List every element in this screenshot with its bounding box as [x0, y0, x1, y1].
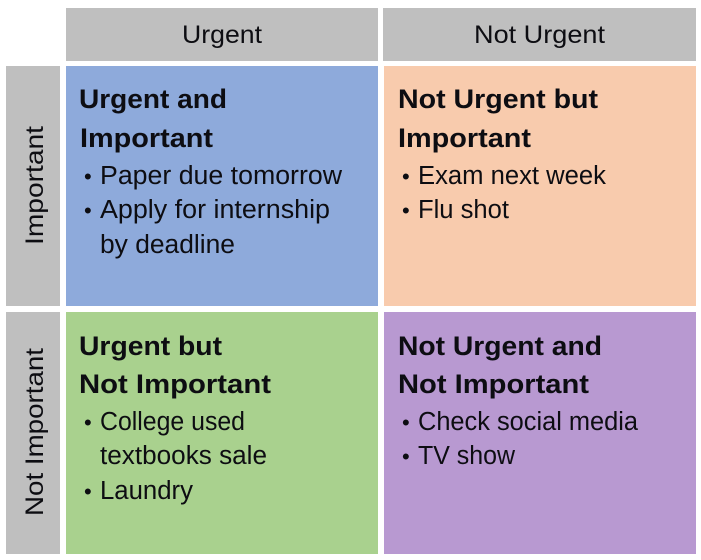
heading: Not Important [398, 369, 589, 399]
task list: • [402, 410, 410, 435]
task list: TV show [418, 442, 516, 470]
row header: Not Important: Not Important [21, 348, 49, 516]
heading [79, 84, 227, 153]
task list: • [402, 198, 410, 223]
task list: Paper due tomorrow [100, 162, 343, 190]
task list: • [402, 444, 410, 469]
panel: urgent and important [66, 66, 378, 306]
column header: Urgent [66, 8, 378, 61]
task list: Laundry [100, 477, 193, 505]
column header: Not Urgent [383, 8, 696, 61]
task list [84, 408, 267, 505]
heading: Important [80, 123, 213, 153]
heading: Urgent but [79, 331, 222, 361]
row header: Not Important [6, 312, 60, 554]
heading: Not Important [79, 369, 271, 399]
task list: Apply for internship [100, 196, 330, 224]
heading: Not Urgent but [398, 84, 598, 114]
panel: not urgent and not important [384, 312, 696, 554]
panel: not urgent but important [384, 66, 696, 306]
heading [79, 331, 271, 399]
task list [84, 162, 343, 259]
task list [402, 408, 639, 470]
heading [398, 331, 602, 399]
task list: • [84, 479, 92, 504]
column header: Not Urgent: Not Urgent [474, 21, 605, 49]
task list: College used [100, 408, 245, 436]
task list: • [84, 198, 92, 223]
panel: urgent but not important [66, 312, 378, 554]
row header: Important: Important [21, 126, 49, 245]
task list: • [84, 164, 92, 189]
row header: Important [6, 66, 60, 306]
task list [402, 162, 606, 224]
heading: Not Urgent and [398, 331, 602, 361]
task list: by deadline [100, 231, 235, 259]
task list: Flu shot [418, 196, 509, 224]
task list: • [402, 164, 410, 189]
column header: Urgent: Urgent [182, 21, 262, 49]
task list: textbooks sale [100, 442, 267, 470]
heading [398, 84, 598, 153]
task list: Check social media [418, 408, 639, 436]
heading: Urgent and [79, 84, 227, 114]
heading: Important [398, 123, 531, 153]
task list: Exam next week [418, 162, 606, 190]
task list: • [84, 410, 92, 435]
